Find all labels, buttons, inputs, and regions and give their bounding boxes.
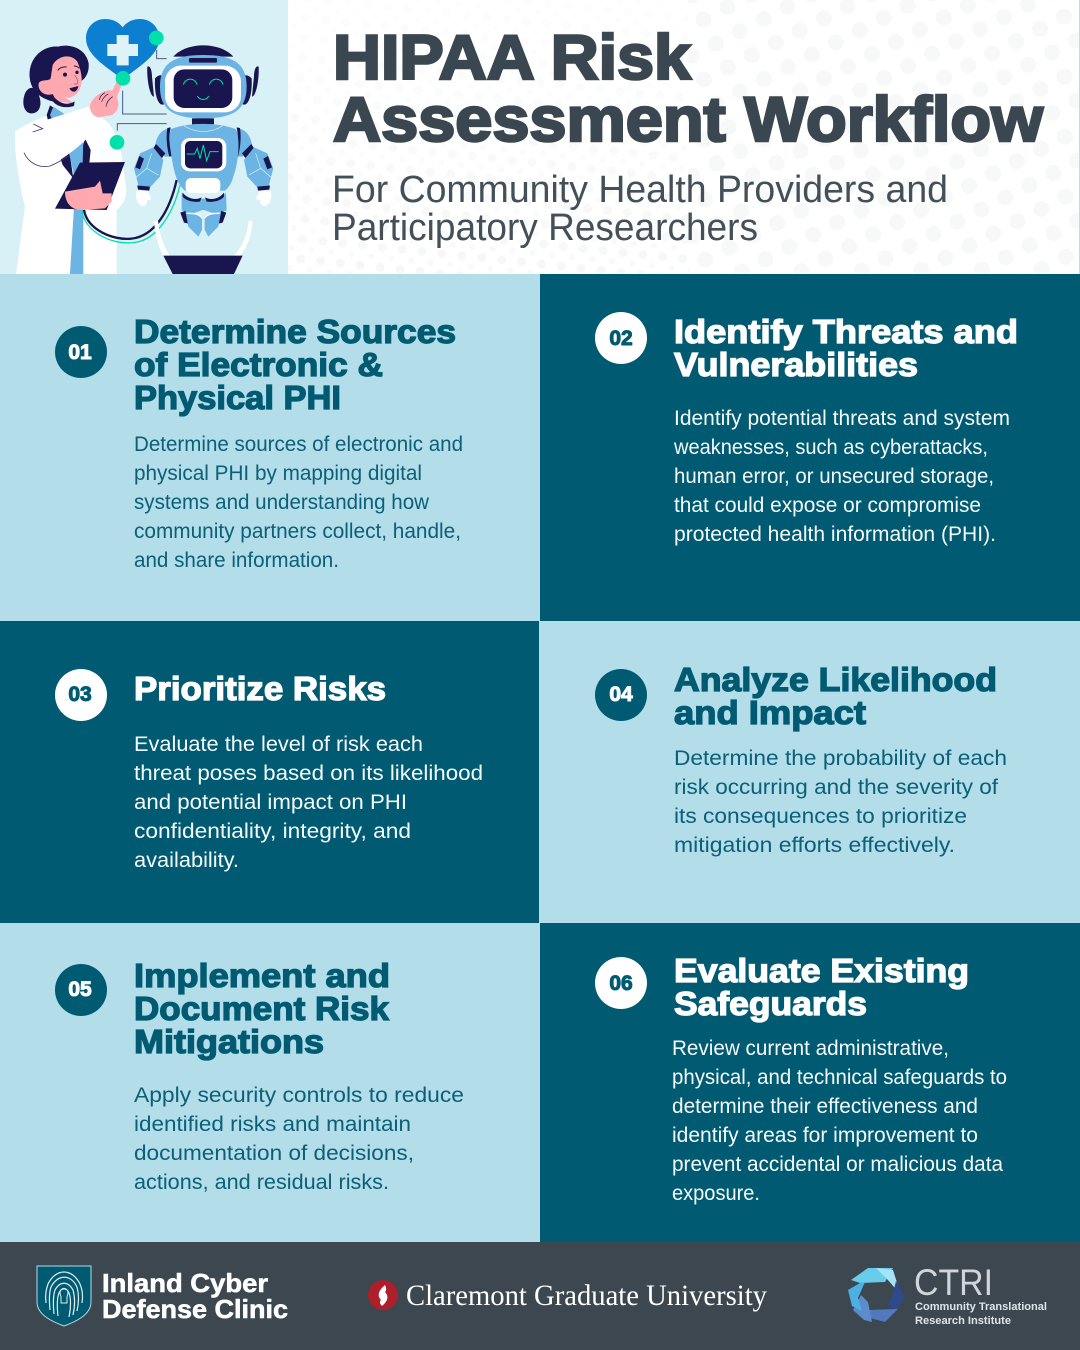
body 02: weaknesses, such as cyberattacks, (673, 435, 988, 459)
body 06: Review current administrative, (672, 1036, 949, 1060)
heading 03: Prioritize Risks (134, 670, 386, 707)
step number 01 (55, 326, 107, 378)
body 01 (134, 432, 463, 572)
doctor face details (58, 66, 79, 92)
body 06: prevent accidental or malicious data (672, 1152, 1003, 1176)
heading 01 (134, 313, 456, 416)
panel: step 05 (0, 923, 540, 1242)
body 04 (674, 746, 1007, 857)
connector lines (117, 50, 167, 131)
step number 04 (595, 669, 647, 721)
heading 04: Analyze Likelihood (674, 661, 997, 698)
body 03: and potential impact on PHI (134, 790, 407, 814)
title: Assessment Workflow (333, 85, 1044, 155)
step number 02 (595, 312, 647, 364)
body 03 (134, 732, 483, 872)
icon: CTRI polygon ring (848, 1268, 905, 1322)
body 03: availability. (134, 848, 239, 872)
heading 01: Determine Sources (134, 313, 456, 350)
heading 04: and Impact (674, 694, 866, 731)
robot (134, 45, 273, 274)
step number 06 (595, 957, 647, 1009)
body 06: identify areas for improvement to (672, 1123, 978, 1147)
heading 02 (674, 313, 1018, 383)
logo: CTRI: Research Institute (915, 1315, 1011, 1327)
heading 06: Evaluate Existing (674, 952, 969, 989)
panel: step 03 (0, 621, 539, 923)
step number 05 (55, 964, 107, 1016)
subtitle: Participatory Researchers (332, 207, 758, 249)
body 05 (134, 1083, 464, 1194)
logo: Claremont Graduate University: Claremont Graduate University (406, 1279, 767, 1312)
panel: step 02 (540, 274, 1080, 621)
body 01: Determine sources of electronic and (134, 432, 463, 456)
body 04: mitigation efforts effectively. (674, 833, 955, 857)
body 05: identified risks and maintain (134, 1112, 411, 1136)
body 02 (673, 406, 1010, 546)
subtitle (332, 169, 948, 249)
heading 01: of Electronic & (134, 346, 383, 383)
step number 05: 05 (68, 978, 92, 1001)
body 04: Determine the probability of each (674, 746, 1007, 770)
logo: Inland Cyber Defense Clinic: Defense Clinic (102, 1294, 288, 1324)
hologram base (154, 221, 253, 274)
body 05: actions, and residual risks. (134, 1170, 389, 1194)
body 03: threat poses based on its likelihood (134, 761, 483, 785)
heading 04 (674, 661, 997, 731)
body 02: Identify potential threats and system (674, 406, 1010, 430)
heading 01: Physical PHI (134, 379, 341, 416)
logo: CTRI: CTRI (914, 1262, 993, 1303)
logo: CTRI (848, 1262, 1047, 1327)
panel: step 04 (539, 621, 1080, 923)
step number 02: 02 (609, 327, 633, 350)
heading 05: Implement and (134, 957, 390, 994)
heading 02: Vulnerabilities (674, 346, 918, 383)
stethoscope cable (82, 180, 180, 243)
robot right arm (235, 127, 273, 206)
heading 06 (674, 952, 969, 1022)
body 01: physical PHI by mapping digital (134, 461, 422, 485)
body 01: community partners collect, handle, (134, 519, 461, 543)
robot left arm (134, 127, 172, 206)
heading 06: Safeguards (674, 985, 867, 1022)
robot legs (180, 193, 227, 237)
body 05: documentation of decisions, (134, 1141, 414, 1165)
footer (0, 1242, 1080, 1350)
heading 02: Identify Threats and (674, 313, 1018, 350)
header background (288, 0, 1080, 274)
heading 05: Document Risk (134, 990, 390, 1027)
body 01: systems and understanding how (134, 490, 429, 514)
body 02: human error, or unsecured storage, (674, 464, 994, 488)
logo: CTRI: Community Translational (915, 1301, 1047, 1313)
step number 03 (55, 669, 107, 721)
body 03: Evaluate the level of risk each (134, 732, 423, 756)
robot torso (170, 124, 239, 193)
body 06: determine their effectiveness and (672, 1094, 978, 1118)
icon: medical heart (86, 19, 164, 150)
doctor (15, 46, 126, 274)
body 05: Apply security controls to reduce (134, 1083, 464, 1107)
icon: fingerprint shield (37, 1266, 91, 1326)
body 06: exposure. (672, 1181, 760, 1205)
subtitle: For Community Health Providers and (332, 169, 948, 211)
body 06: physical, and technical safeguards to (672, 1065, 1007, 1089)
heading 05: Mitigations (134, 1023, 324, 1060)
panel: step 01 (0, 274, 540, 621)
title (333, 23, 1044, 155)
body 01: and share information. (134, 548, 339, 572)
logo: Inland Cyber Defense Clinic (37, 1266, 288, 1326)
body 03: confidentiality, integrity, and (134, 819, 411, 843)
body 04: its consequences to prioritize (674, 804, 967, 828)
step number 06: 06 (609, 972, 633, 995)
body 06 (672, 1036, 1007, 1205)
step number 01: 01 (68, 341, 92, 364)
panel: step 06 (540, 923, 1080, 1242)
body 02: that could expose or compromise (674, 493, 981, 517)
step number 04: 04 (609, 683, 633, 706)
body 04: risk occurring and the severity of (674, 775, 998, 799)
body 02: protected health information (PHI). (674, 522, 996, 546)
title: HIPAA Risk (333, 23, 692, 93)
heading 05 (134, 957, 390, 1060)
step number 03: 03 (68, 683, 92, 706)
logo: Inland Cyber Defense Clinic: Inland Cyber (102, 1268, 268, 1298)
